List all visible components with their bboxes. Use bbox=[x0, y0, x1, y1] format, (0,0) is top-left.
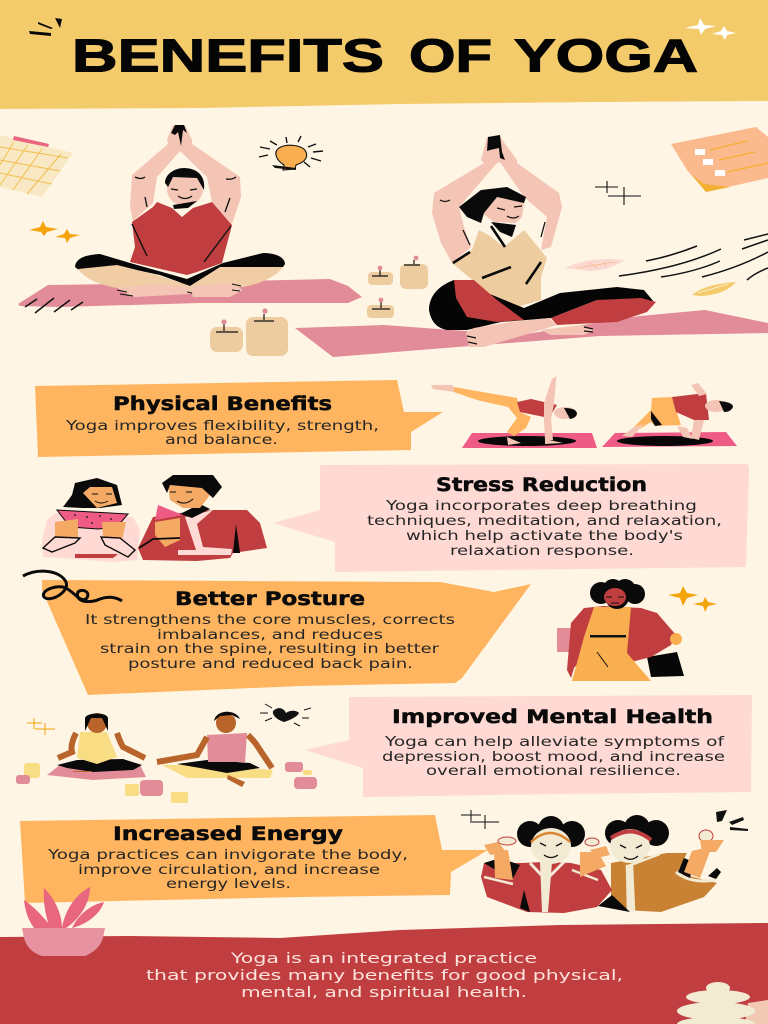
body text bbox=[47, 848, 408, 892]
body text: Yoga improves flexibility, strength, bbox=[65, 419, 379, 434]
pose two bbox=[634, 397, 681, 430]
heading: Stress Reduction bbox=[436, 475, 647, 496]
mats bbox=[462, 433, 597, 448]
candles bbox=[24, 763, 40, 778]
body text: overall emotional resilience. bbox=[426, 764, 681, 779]
body text: Yoga can help alleviate symptoms of bbox=[384, 735, 725, 750]
man body bbox=[138, 510, 267, 561]
right meditator bbox=[162, 765, 273, 778]
body text: which help activate the body's bbox=[406, 529, 683, 544]
tank top bbox=[452, 230, 547, 307]
feet bbox=[466, 318, 557, 347]
hair bbox=[459, 187, 526, 223]
left head bbox=[517, 816, 585, 847]
sparkles bbox=[668, 586, 717, 612]
illustration: couple eating watermelon bbox=[42, 475, 267, 562]
icon: speed lines bbox=[619, 234, 768, 280]
body text: energy levels. bbox=[166, 877, 291, 892]
red legs bbox=[454, 280, 524, 322]
title bbox=[72, 30, 698, 82]
heading: Improved Mental Health bbox=[392, 707, 713, 728]
watermelon bbox=[57, 510, 128, 529]
arms and hands bbox=[130, 125, 241, 224]
pose one bbox=[431, 385, 517, 407]
body text: relaxation response. bbox=[450, 544, 634, 559]
feet bbox=[117, 283, 243, 297]
icon: stacked stones bbox=[677, 982, 768, 1024]
body text: depression, boost mood, and increase bbox=[382, 750, 725, 765]
red robe bbox=[481, 862, 612, 913]
footer band bbox=[0, 923, 768, 1024]
body text bbox=[65, 419, 379, 448]
small sparkles bbox=[27, 718, 55, 735]
illustration: two meditators with candles bbox=[16, 712, 317, 803]
woman face bbox=[83, 487, 117, 508]
dress bbox=[572, 607, 651, 681]
body text: and balance. bbox=[165, 433, 278, 448]
jacket bbox=[567, 606, 676, 678]
footer text: Yoga is an integrated practice bbox=[230, 951, 537, 967]
icon: checklist note bbox=[671, 127, 768, 192]
icon: orange sparkles left bbox=[29, 221, 80, 243]
red shirt bbox=[130, 202, 232, 275]
burst marks bbox=[716, 810, 748, 831]
handbag bbox=[647, 652, 684, 677]
woman arms bbox=[55, 519, 126, 548]
body text: improve circulation, and increase bbox=[78, 863, 380, 878]
footer text: mental, and spiritual health. bbox=[241, 985, 527, 1001]
body text: It strengthens the core muscles, corrects bbox=[85, 613, 455, 628]
illustration: seated man bbox=[18, 125, 362, 313]
icon: black heart bbox=[260, 704, 311, 726]
body text: techniques, meditation, and relaxation, bbox=[367, 514, 722, 529]
body text bbox=[382, 735, 725, 779]
face bbox=[604, 588, 626, 606]
icon: potted plant bbox=[22, 887, 105, 956]
icon: black burst marks by title bbox=[29, 18, 62, 36]
arms and hands bbox=[432, 135, 562, 263]
yoga mat bbox=[18, 279, 362, 307]
body text: Yoga incorporates deep breathing bbox=[385, 499, 697, 514]
title: YOGA bbox=[514, 30, 698, 82]
panel: better posture bbox=[42, 580, 531, 695]
hands and mask pads bbox=[498, 837, 516, 845]
head bbox=[167, 172, 203, 206]
hair bbox=[590, 579, 645, 609]
man collar bbox=[178, 510, 232, 555]
title: BENEFITS bbox=[72, 30, 384, 82]
right head bbox=[605, 815, 669, 846]
icon: calendar bbox=[0, 135, 73, 197]
body text bbox=[367, 499, 722, 559]
footer text: that provides many benefits for good physical, bbox=[146, 968, 623, 984]
woman body bbox=[42, 513, 140, 562]
brown robe bbox=[611, 853, 717, 912]
beige legs bbox=[78, 265, 283, 297]
panel: increased energy bbox=[20, 815, 488, 903]
body text: strain on the spine, resulting in better bbox=[100, 642, 440, 657]
body text bbox=[85, 613, 455, 672]
sparkles bbox=[461, 810, 499, 829]
illustration: standing woman with bag bbox=[557, 579, 717, 681]
panel: improved mental health bbox=[305, 695, 752, 797]
left meditator bbox=[47, 765, 146, 780]
icon: black swirl bbox=[23, 571, 122, 602]
illustration: standing yoga poses bbox=[431, 376, 737, 448]
illustration: two people with face masks bbox=[461, 810, 748, 913]
illustration: seated woman bbox=[295, 135, 768, 357]
header band bbox=[0, 0, 768, 109]
melon slice and hand bbox=[155, 505, 183, 520]
arms bbox=[494, 846, 712, 880]
icon: light bulb bbox=[259, 136, 323, 170]
books bbox=[557, 628, 579, 652]
hand bbox=[670, 633, 682, 645]
body text: imbalances, and reduces bbox=[157, 628, 383, 643]
body text: posture and reduced back pain. bbox=[128, 657, 413, 672]
panel: physical benefits bbox=[35, 380, 443, 457]
icon: black sparkles right bbox=[595, 181, 641, 205]
man face bbox=[168, 485, 210, 508]
heading: Better Posture bbox=[175, 589, 365, 610]
heading: Increased Energy bbox=[113, 824, 343, 845]
face bbox=[482, 197, 524, 223]
yoga mat bbox=[295, 310, 768, 357]
title: OF bbox=[409, 30, 492, 82]
black legs bbox=[429, 280, 654, 330]
body text: Yoga practices can invigorate the body, bbox=[47, 848, 408, 863]
man hair bbox=[162, 475, 222, 498]
footer text bbox=[146, 951, 623, 1001]
woman hair bbox=[63, 478, 122, 508]
black legs bbox=[75, 253, 285, 286]
heading: Physical Benefits bbox=[113, 394, 332, 415]
icon: leaves bbox=[565, 259, 736, 296]
icon: white sparkles by title bbox=[685, 18, 736, 40]
illustration: candles bbox=[210, 256, 428, 356]
panel: stress reduction bbox=[273, 464, 749, 572]
